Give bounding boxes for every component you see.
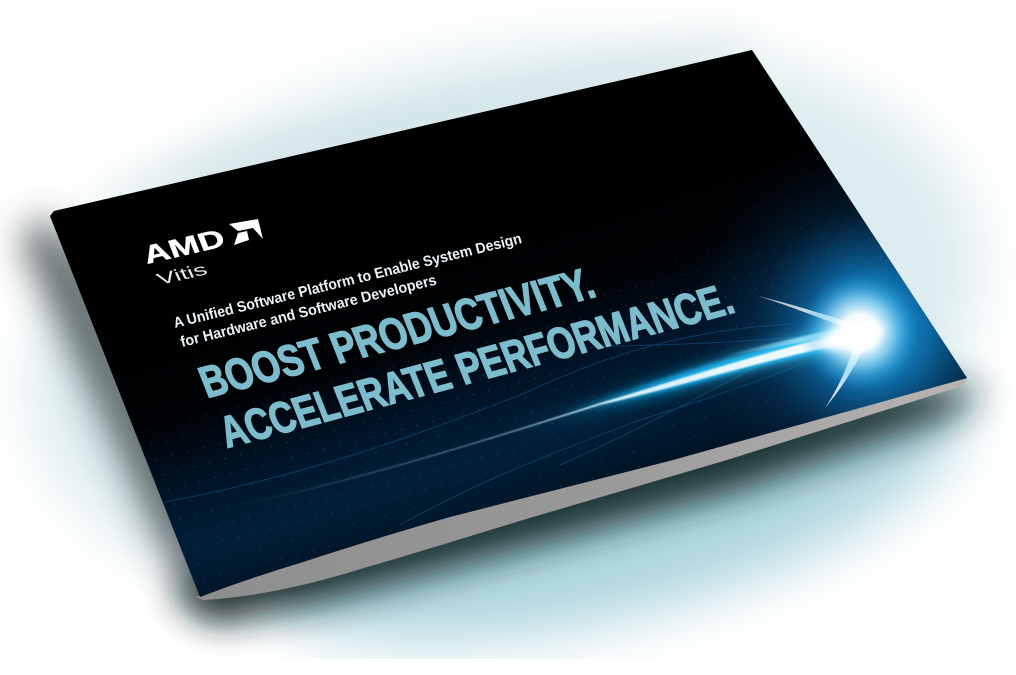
light streak arrow: [268, 277, 913, 500]
brochure cover: [50, 50, 967, 597]
headline: BOOST PRODUCTIVITY.: [192, 258, 602, 407]
headline: ACCELERATE PERFORMANCE.: [212, 274, 741, 457]
product name: Vitis: [154, 260, 210, 289]
AMD logo: [148, 219, 263, 264]
AMD logo: AMD: [138, 223, 229, 270]
page stack edge: [196, 378, 967, 600]
headline: [197, 268, 736, 449]
icon: AMD arrow mark: [229, 219, 263, 245]
subtitle: for Hardware and Software Developers: [179, 272, 438, 351]
subtitle: A Unified Software Platform to Enable System Design: [172, 230, 524, 332]
wave lines: [162, 323, 810, 526]
